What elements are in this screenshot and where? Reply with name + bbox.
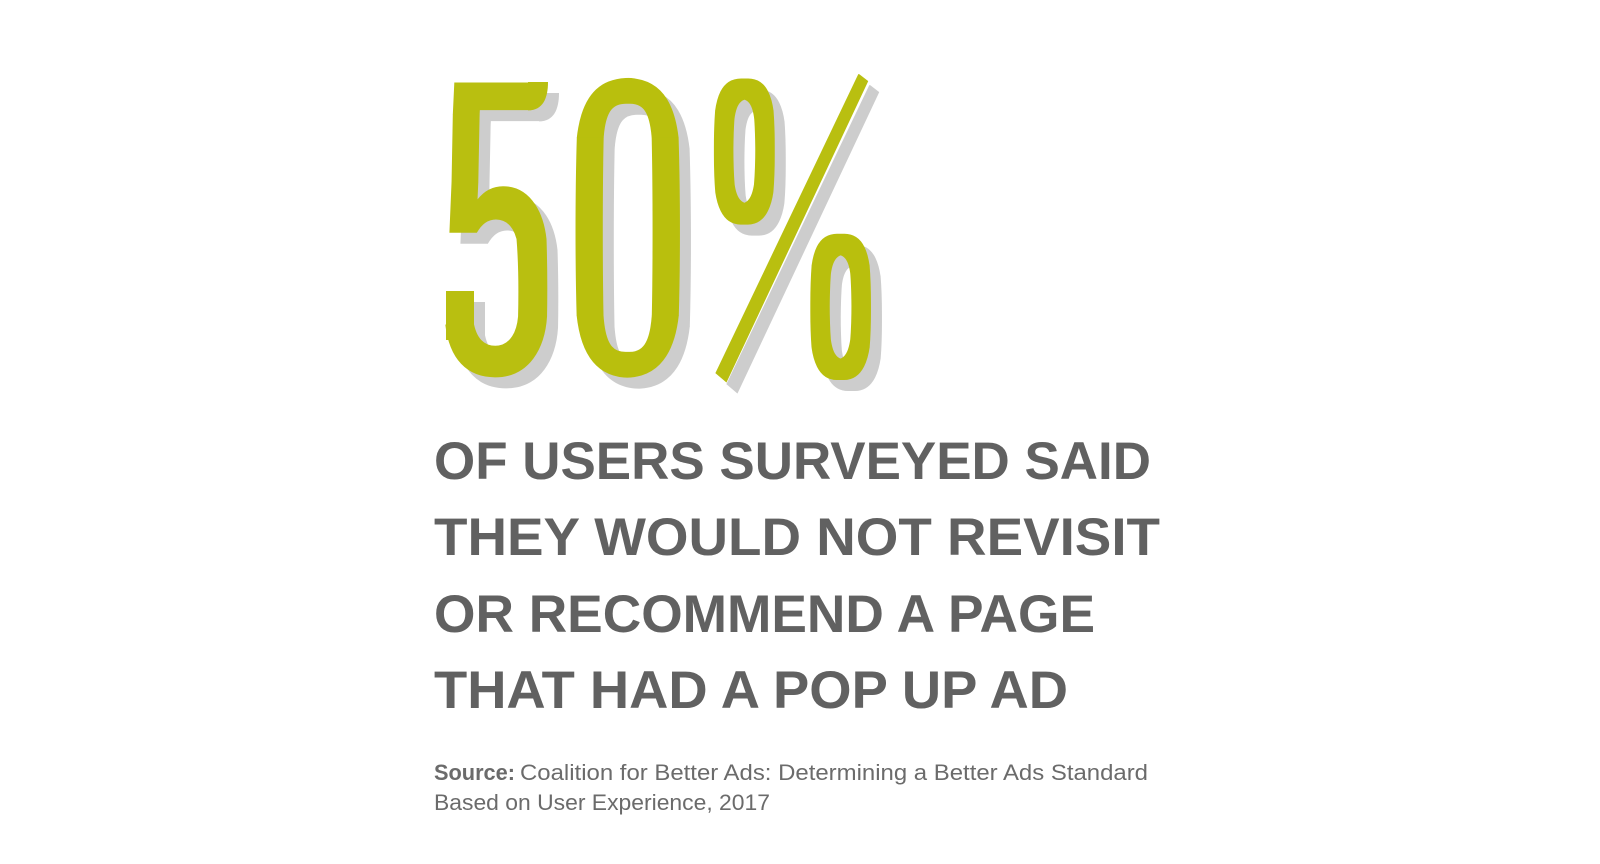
statistic figure bbox=[445, 74, 871, 382]
statistic drop shadow: 5 bbox=[450, 35, 564, 337]
statistic figure: 0 bbox=[564, 158, 691, 427]
headline text bbox=[434, 432, 1160, 720]
statistic figure: 5 bbox=[439, 24, 553, 326]
headline text: THAT HAD A POP UP AD bbox=[434, 661, 1068, 720]
statistic drop shadow: 0 bbox=[576, 39, 702, 308]
source note bbox=[434, 760, 1148, 815]
statistic drop shadow: % bbox=[731, 18, 885, 504]
statistic figure: % bbox=[711, 66, 866, 334]
statistic figure: 5 bbox=[439, 52, 553, 387]
statistic figure: 5 bbox=[439, 114, 553, 437]
statistic drop shadow: % bbox=[731, 170, 885, 437]
big statistic: 50% bbox=[445, 74, 882, 394]
statistic drop shadow: % bbox=[731, 137, 885, 404]
statistic figure: % bbox=[720, 159, 874, 426]
statistic drop shadow bbox=[460, 78, 882, 394]
source note: Source: bbox=[434, 760, 515, 785]
headline text: THEY WOULD NOT REVISIT bbox=[434, 508, 1160, 567]
headline text: OF USERS SURVEYED SAID bbox=[434, 432, 1151, 491]
statistic figure: % bbox=[720, 7, 874, 493]
statistic figure: 0 bbox=[564, 28, 691, 297]
statistic drop shadow: % bbox=[722, 44, 877, 312]
source note: Coalition for Better Ads: Determining a Better Ads Standard bbox=[520, 760, 1148, 785]
statistic drop shadow: 0 bbox=[576, 169, 702, 438]
statistic drop shadow: % bbox=[722, 77, 877, 345]
statistic drop shadow: % bbox=[664, 0, 938, 490]
statistic drop shadow: 5 bbox=[450, 125, 564, 448]
statistic drop shadow: 5 bbox=[450, 63, 564, 398]
statistic figure: % bbox=[711, 33, 866, 301]
statistic figure: % bbox=[720, 126, 874, 393]
headline text: OR RECOMMEND A PAGE bbox=[434, 585, 1095, 644]
source note: Based on User Experience, 2017 bbox=[434, 790, 770, 815]
